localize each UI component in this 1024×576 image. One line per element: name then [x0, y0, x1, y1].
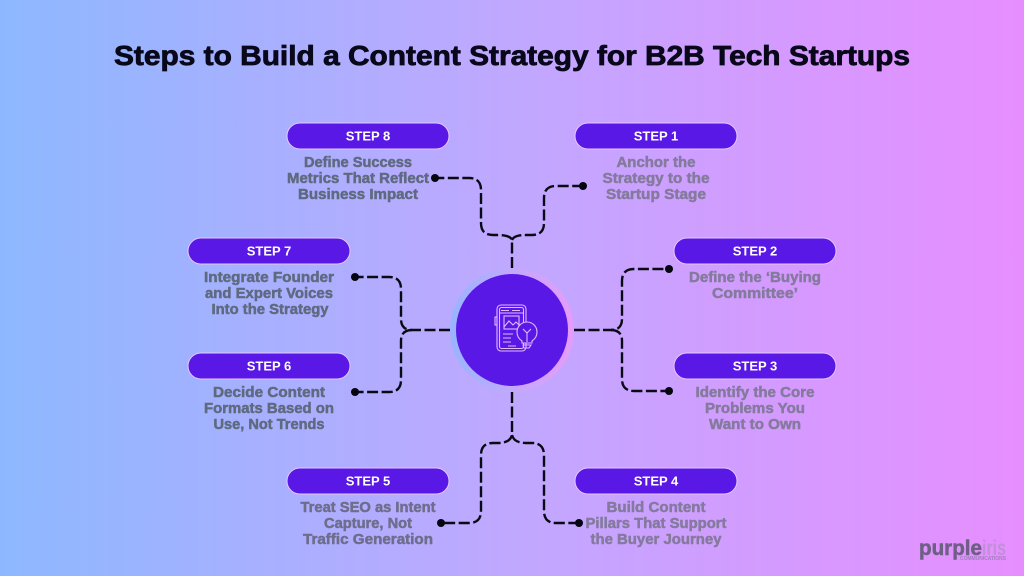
step 5 — [287, 468, 449, 548]
step 8: STEP 8 — [346, 128, 390, 144]
step 8 description: Define Success — [304, 155, 412, 171]
title: Steps to Build a Content Strategy for B2B Tech Startups — [114, 40, 910, 71]
step 3: STEP 3 — [733, 358, 777, 374]
step 1 description: Startup Stage — [606, 187, 706, 203]
step 7 description: and Expert Voices — [205, 286, 333, 302]
step 1 — [575, 123, 737, 203]
step 6 — [188, 353, 350, 433]
step 3 description: Identify the Core — [696, 385, 814, 401]
step 5 description: Treat SEO as Intent — [300, 500, 436, 516]
step 7 — [188, 238, 350, 318]
step 4 description: Build Content — [606, 500, 706, 516]
connector: left branches to step 7 and step 6 — [351, 273, 450, 396]
connector: bottom branches to step 5 and step 4 — [437, 392, 583, 527]
step 3 description: Want to Own — [709, 417, 801, 433]
logo: purpleiris communications: iris — [982, 537, 1006, 560]
step 6 description: Formats Based on — [204, 401, 334, 417]
step 5 description: Traffic Generation — [303, 532, 433, 548]
step 6: STEP 6 — [247, 358, 291, 374]
step 8 — [287, 123, 449, 203]
logo: purpleiris communications: purple — [919, 537, 982, 560]
connector: right branches to step 2 and step 3 — [574, 265, 673, 395]
connector: top branches to step 8 and step 1 — [431, 174, 587, 268]
step 6 description: Decide Content — [213, 385, 325, 401]
step 5 description: Capture, Not — [324, 516, 412, 532]
step 7: STEP 7 — [247, 244, 291, 258]
step 1 description: Strategy to the — [602, 171, 710, 187]
step 1 description: Anchor the — [616, 155, 696, 171]
logo: purpleiris communications: COMMUNICATIONS — [960, 556, 1007, 562]
step 4 — [575, 468, 737, 548]
icon: phone with image and light bulb — [495, 305, 537, 351]
step 5: STEP 5 — [346, 474, 390, 488]
step 6 description: Use, Not Trends — [214, 417, 324, 433]
step 3 — [674, 353, 836, 433]
step 2: STEP 2 — [733, 244, 777, 258]
logo: purpleiris communications — [919, 537, 1007, 562]
step 1: STEP 1 — [634, 128, 678, 144]
step 7 description: Into the Strategy — [212, 302, 328, 318]
step 7 description: Integrate Founder — [204, 270, 334, 286]
step 4: STEP 4 — [634, 474, 679, 488]
step 2 — [674, 238, 836, 302]
central hub — [450, 268, 574, 392]
step 4 description: the Buyer Journey — [590, 532, 722, 548]
step 4 description: Pillars That Support — [586, 516, 727, 532]
step 8 description: Metrics That Reflect — [287, 171, 429, 187]
step 2 description: Define the ‘Buying — [689, 270, 821, 286]
step 3 description: Problems You — [705, 401, 805, 417]
step 8 description: Business Impact — [298, 187, 418, 203]
step 2 description: Committee’ — [712, 286, 798, 302]
